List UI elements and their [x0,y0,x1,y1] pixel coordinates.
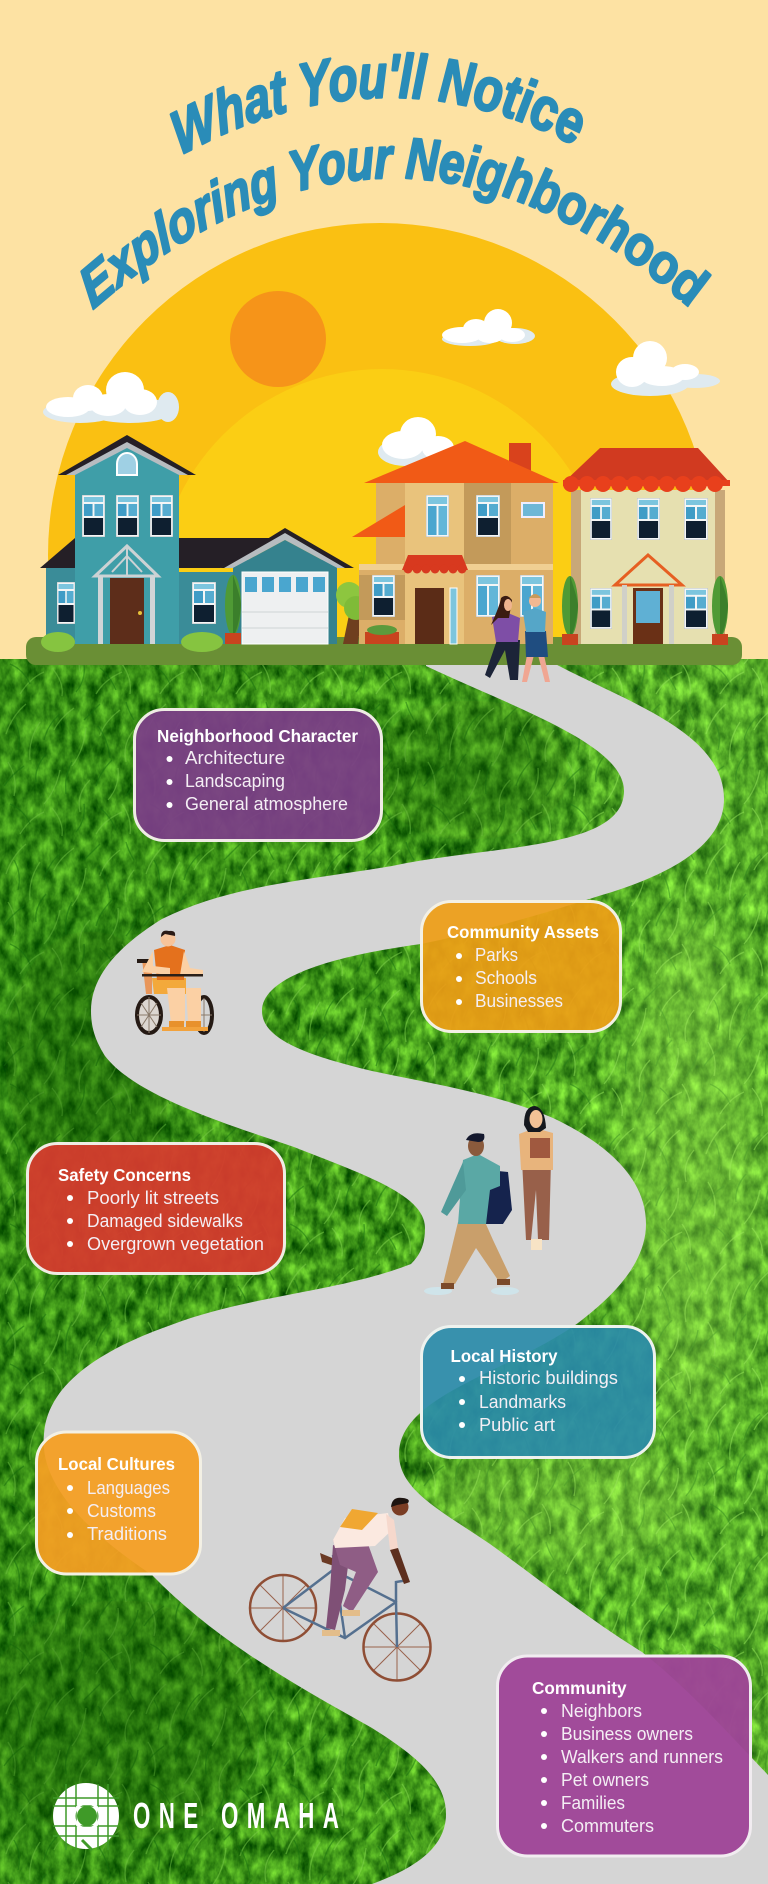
list: Landscaping [185,771,285,791]
list: Business owners [561,1724,693,1744]
list: Damaged sidewalks [87,1211,243,1231]
list: Schools [475,968,537,988]
heading: Local Cultures [58,1454,175,1474]
logo: One Omaha [53,1783,339,1850]
list: General atmosphere [185,794,348,814]
students walking [424,1106,553,1295]
list [166,748,348,814]
heading: Safety Concerns [58,1165,191,1185]
cloud right [611,341,720,396]
sun [230,291,326,387]
cream house [562,448,730,645]
winding road [44,660,768,1884]
large sun halo [48,223,712,887]
title: Exploring Your Neighborhood [80,137,712,310]
panel: neighborhood character [134,710,382,840]
list: Languages [87,1478,170,1498]
list: Public art [479,1415,555,1435]
cloud middle [442,309,535,346]
panel: local history [422,1326,654,1458]
teal house [40,435,354,652]
list: Architecture [185,748,285,768]
list: Pet owners [561,1770,649,1790]
heading: Community [532,1678,627,1698]
cyclist [250,1498,430,1680]
two women walking [485,594,550,682]
list: Overgrown vegetation [87,1234,264,1254]
list: Neighbors [561,1701,642,1721]
cloud behind orange house [378,417,454,466]
lawn strip [26,637,742,665]
cloud left [43,372,179,423]
panel: safety concerns [28,1144,284,1274]
icon: grid globe [53,1783,119,1850]
list: Businesses [475,991,563,1011]
list [67,1478,170,1544]
list: Walkers and runners [561,1747,723,1767]
list [456,945,563,1011]
title [80,52,712,310]
grass field [0,659,768,1884]
list: Customs [87,1501,156,1521]
panel: community assets [422,902,620,1032]
list [541,1701,723,1836]
wordmark: ONE OMAHA [133,1797,339,1836]
heading: Neighborhood Character [157,726,358,746]
list: Commuters [561,1816,654,1836]
list: Poorly lit streets [87,1188,219,1208]
panel: community [498,1656,750,1856]
inner sun halo [157,369,607,819]
list: Families [561,1793,625,1813]
list [459,1368,618,1435]
heading: Community Assets [447,922,599,942]
heading: Local History [450,1346,558,1366]
wheelchair user [137,931,212,1033]
tree between houses [336,582,368,644]
list: Traditions [87,1524,167,1544]
panel: local cultures [36,1432,200,1574]
title: What You'll Notice [170,52,584,154]
list: Landmarks [479,1392,566,1412]
orange house [352,441,559,644]
list [67,1188,264,1254]
list: Parks [475,945,518,965]
list: Historic buildings [479,1368,618,1388]
